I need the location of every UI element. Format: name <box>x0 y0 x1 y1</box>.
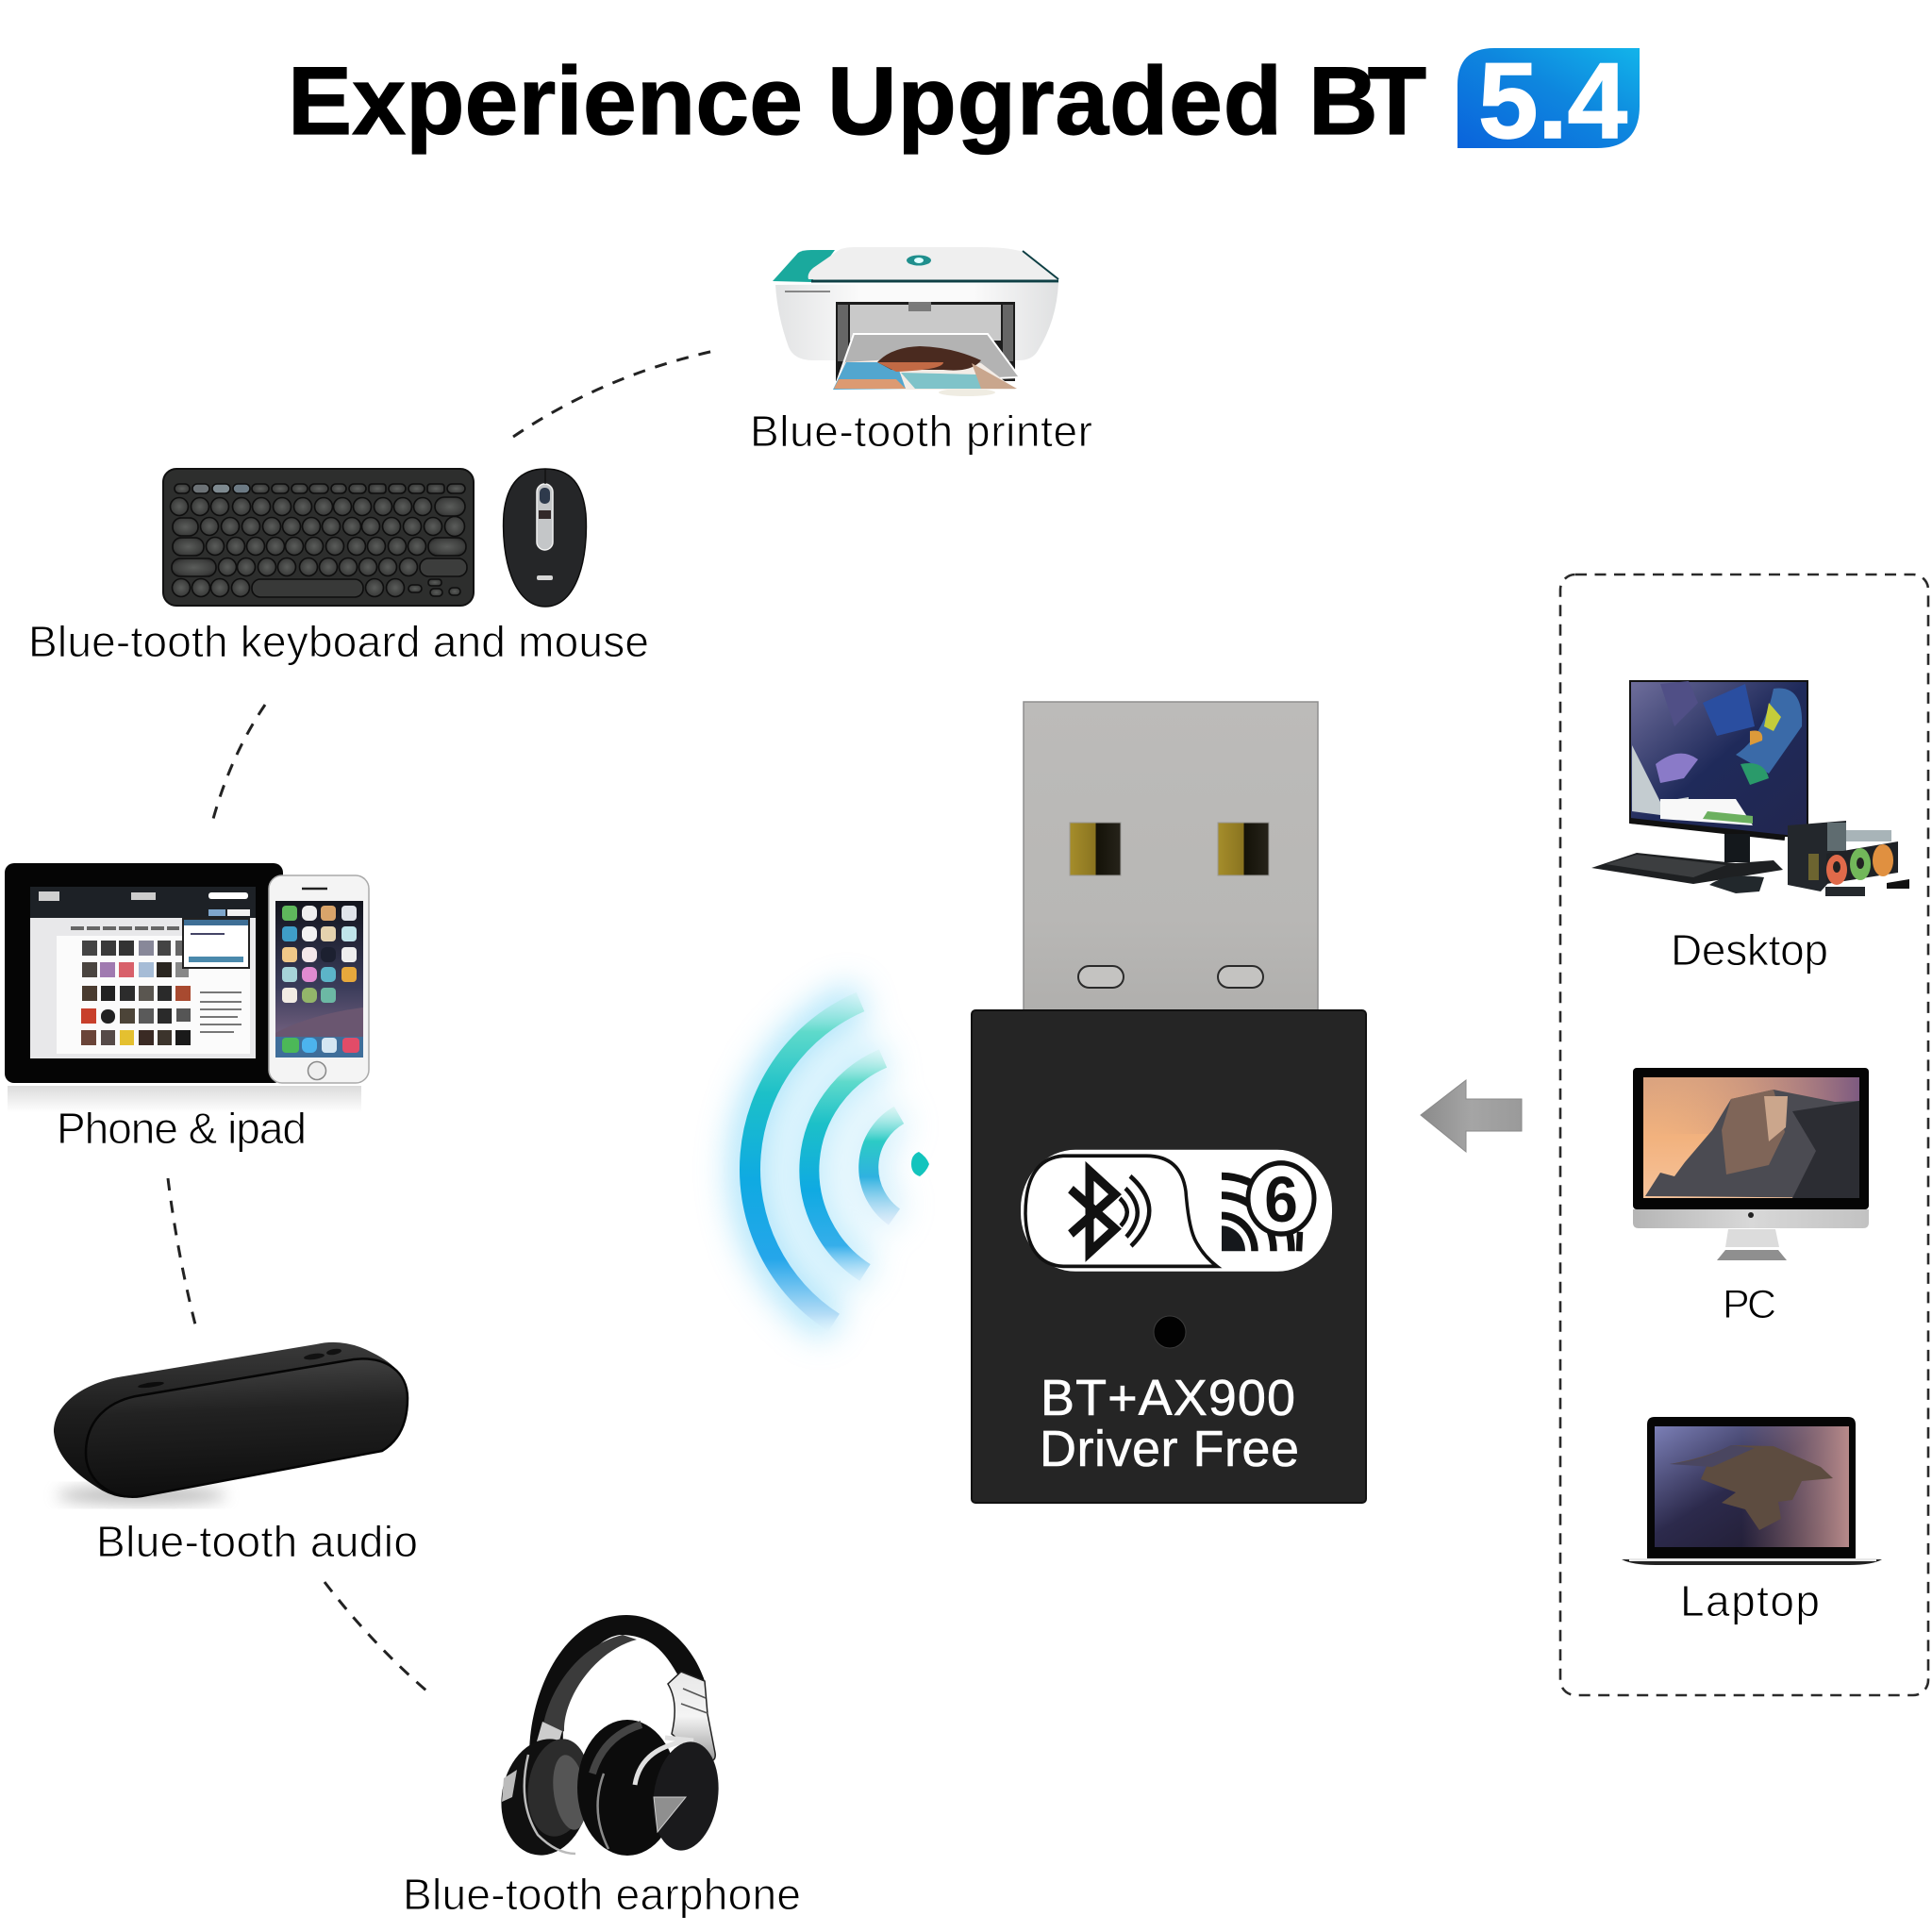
phone <box>269 875 369 1083</box>
bluetooth symbol <box>1071 1171 1115 1252</box>
desktop mouse <box>1709 876 1764 893</box>
icon: wireless signal waves <box>750 1002 929 1323</box>
reflection <box>8 1086 361 1112</box>
icon: PC all-in-one <box>1633 1068 1869 1260</box>
body text: BT+AX900 <box>1041 1370 1295 1426</box>
label: Phone & ipad: Phone & ipad <box>57 1104 307 1153</box>
arrow <box>1421 1080 1522 1152</box>
panel: host devices <box>1560 575 1928 1695</box>
desktop keyboard <box>1591 853 1783 884</box>
dashed connector: keyboard to tablet <box>213 705 265 819</box>
icon: bluetooth speaker <box>54 1342 408 1504</box>
tablet thumbnails <box>81 941 191 1045</box>
label: Blue-tooth audio: Blue-tooth audio <box>96 1517 418 1566</box>
icon: printer <box>773 247 1058 396</box>
keyboard keys <box>170 484 467 597</box>
title: Upgraded <box>827 47 1282 155</box>
wifi 6 symbol: 6 <box>1264 1164 1298 1237</box>
dashed connector: speaker to headphones <box>325 1582 427 1691</box>
icon: keyboard and mouse <box>163 469 586 607</box>
monitor <box>1630 681 1807 838</box>
dashed connector: tablet to speaker <box>168 1178 196 1328</box>
label: Laptop: Laptop <box>1680 1576 1820 1625</box>
icon: headphones <box>492 1615 725 1862</box>
indicator hole <box>1154 1316 1186 1348</box>
body text line two: Driver Free <box>1040 1421 1299 1477</box>
tower and fans <box>1788 821 1909 896</box>
badge: version 5.4: 5.4 <box>1478 42 1627 161</box>
logo pill <box>1021 1150 1332 1272</box>
dashed connector: printer to keyboard <box>513 351 714 437</box>
tablet popup dialog <box>183 919 249 968</box>
icon: tablet and phone <box>5 863 369 1112</box>
icon: desktop computer <box>1591 681 1909 896</box>
label: Desktop: Desktop <box>1671 925 1828 974</box>
label: PC: PC <box>1723 1282 1776 1327</box>
label: Blue-tooth printer: Blue-tooth printer <box>750 407 1092 456</box>
tablet <box>5 863 283 1083</box>
wifi 6 symbol <box>1222 1163 1314 1251</box>
label: Blue-tooth keyboard and mouse: Blue-tooth keyboard and mouse <box>28 617 649 666</box>
phone app icons <box>282 906 359 1053</box>
sound arcs <box>1120 1176 1149 1246</box>
title: Experience <box>288 47 803 155</box>
USB plug <box>1024 702 1318 1011</box>
mouse <box>504 469 586 607</box>
keyboard body <box>163 469 474 606</box>
product: USB dongle <box>972 702 1366 1503</box>
tablet text column <box>200 992 242 1032</box>
title: BT <box>1308 47 1426 155</box>
title <box>288 47 1426 155</box>
icon: laptop <box>1622 1417 1882 1565</box>
dongle body <box>972 1010 1366 1503</box>
label: Blue-tooth earphone: Blue-tooth earphone <box>403 1870 801 1919</box>
